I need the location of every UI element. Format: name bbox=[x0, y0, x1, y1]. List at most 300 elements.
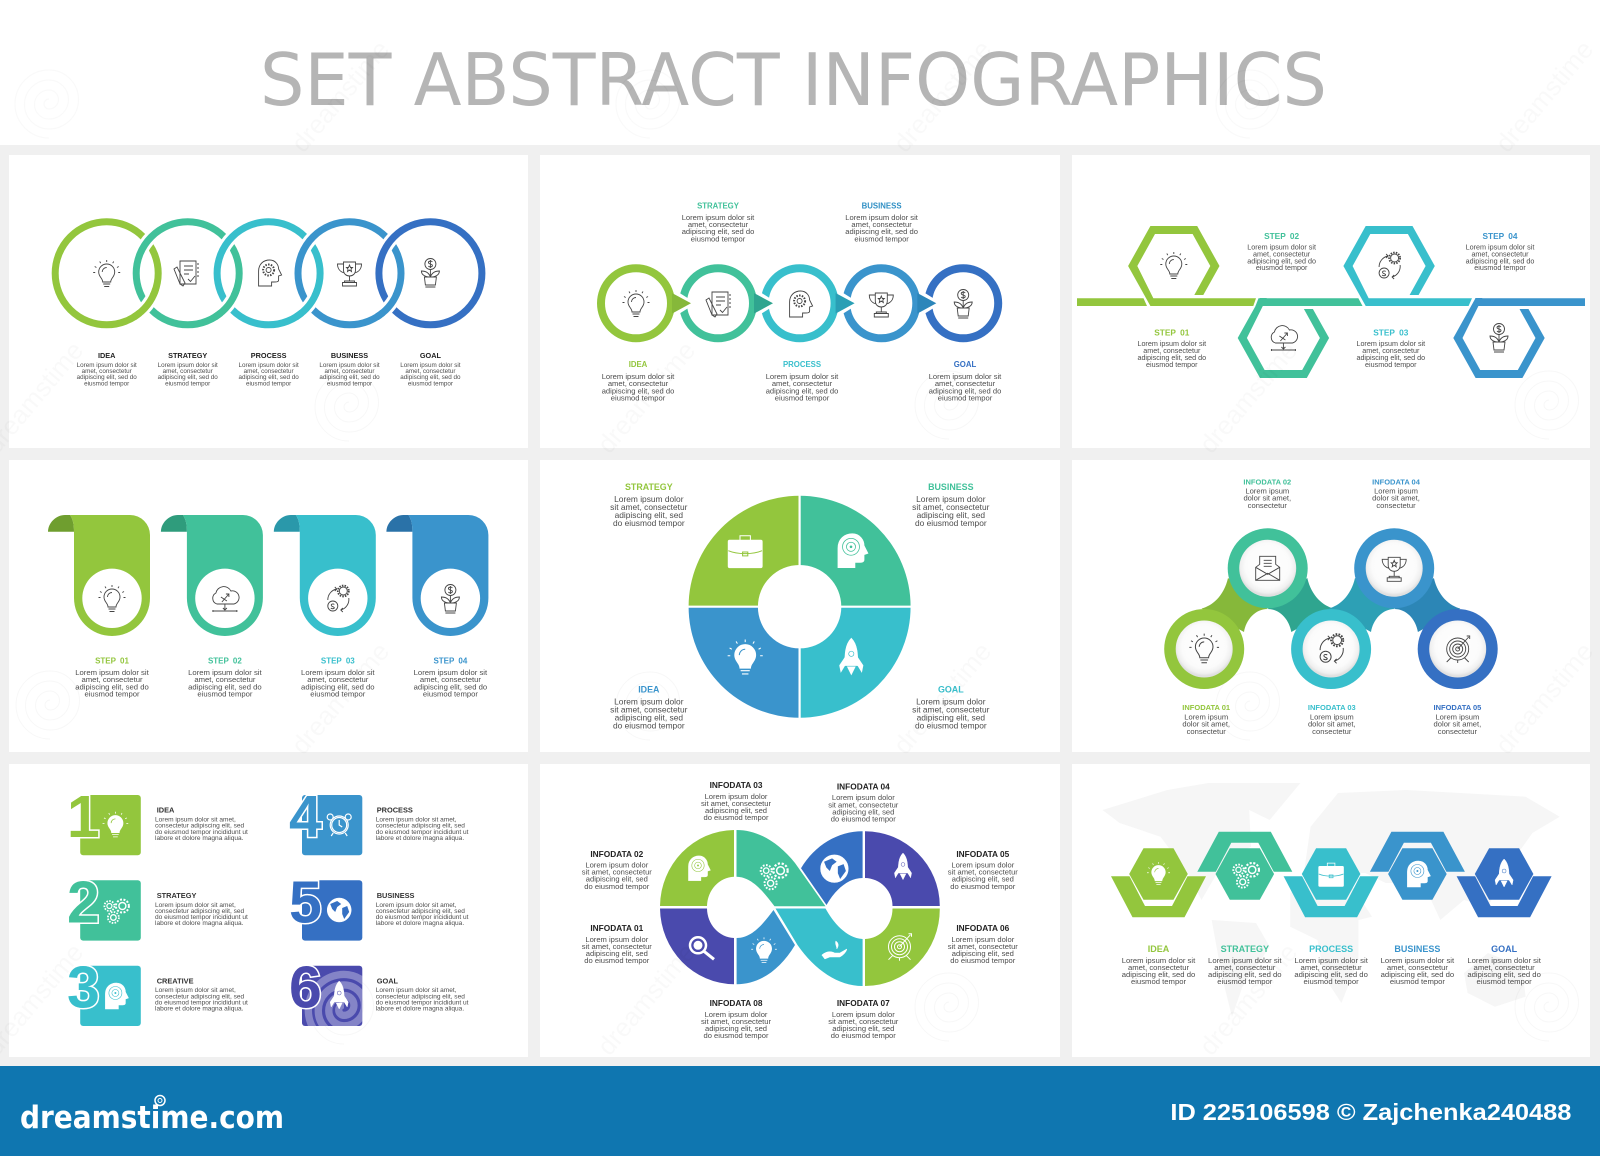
text: GOAL: GOAL bbox=[954, 360, 976, 369]
text: BUSINESS bbox=[912, 482, 990, 528]
text: INFODATA 01: dolor sit amet, bbox=[1182, 720, 1230, 729]
text: INFODATA 02: dolor sit amet, bbox=[1243, 494, 1291, 503]
text: STRATEGY: adipiscing elit, sed do bbox=[1208, 970, 1282, 979]
text: IDEA: Lorem ipsum dolor sit amet, bbox=[155, 817, 236, 824]
text: IDEA: adipiscing elit, sed do bbox=[602, 386, 674, 395]
text: BUSINESS bbox=[845, 202, 919, 243]
text: PROCESS: adipiscing elit, sed do bbox=[238, 374, 299, 381]
text: GOAL: adipiscing elit, sed do bbox=[400, 374, 461, 381]
text: STEP 04: STEP 04 bbox=[433, 656, 468, 666]
text: STRATEGY: amet, consectetur bbox=[163, 368, 213, 375]
text: GOAL: Lorem ipsum dolor sit bbox=[400, 362, 461, 369]
text: STEP 04: adipiscing elit, sed do bbox=[414, 682, 487, 691]
text: GOAL bbox=[400, 351, 461, 387]
text: STEP 02: adipiscing elit, sed do bbox=[188, 682, 262, 691]
text: PROCESS: amet, consectetur bbox=[772, 379, 833, 388]
ribbon 1 bbox=[48, 515, 150, 636]
text: STRATEGY: adipiscing elit, sed do bbox=[158, 374, 218, 381]
text: INFODATA 04: INFODATA 04 bbox=[1372, 477, 1421, 486]
watermark text: dreamstime bbox=[1489, 637, 1599, 760]
text: IDEA: do eiusmod tempor incididunt ut bbox=[155, 829, 248, 836]
timeline bar bbox=[1077, 298, 1585, 306]
panel: infinity diagram bbox=[540, 764, 1060, 1057]
text: STEP 03: Lorem ipsum dolor sit bbox=[301, 668, 375, 677]
text: IDEA: amet, consectetur bbox=[82, 368, 132, 375]
text: INFODATA 04: sit amet, consectetur bbox=[828, 800, 899, 809]
text: STEP 03: STEP 03 bbox=[321, 656, 355, 666]
text: STEP 04: amet, consectetur bbox=[420, 675, 481, 684]
text: INFODATA 03: do eiusmod tempor bbox=[703, 813, 769, 822]
text: IDEA: amet, consectetur bbox=[1128, 963, 1189, 972]
text: PROCESS: amet, consectetur bbox=[1301, 963, 1362, 972]
text: STEP 04 bbox=[1466, 231, 1534, 272]
text: INFODATA 01: sit amet, consectetur bbox=[582, 942, 652, 951]
text: INFODATA 01: do eiusmod tempor bbox=[584, 956, 650, 965]
text: STRATEGY bbox=[682, 202, 755, 243]
text: STEP 01: eiusmod tempor bbox=[84, 690, 140, 699]
hex step 4 bbox=[1370, 832, 1465, 900]
text: STRATEGY: sit amet, consectetur bbox=[610, 502, 688, 512]
text: STRATEGY: Lorem ipsum dolor sit bbox=[682, 213, 755, 222]
text: INFODATA 03 bbox=[701, 780, 772, 822]
panel: connected circles bbox=[1072, 460, 1590, 752]
ribbon 2 bbox=[161, 515, 263, 636]
donut bbox=[687, 494, 912, 719]
text: IDEA: adipiscing elit, sed bbox=[615, 712, 683, 722]
text: INFODATA 04: Lorem ipsum dolor bbox=[832, 793, 895, 802]
text: STRATEGY: do eiusmod tempor bbox=[613, 518, 685, 528]
panel: donut chart bbox=[540, 460, 1060, 752]
text: BUSINESS: do eiusmod tempor incididunt ut bbox=[376, 914, 469, 921]
text: BUSINESS: adipiscing elit, sed do bbox=[845, 227, 918, 236]
infinity segments bbox=[660, 830, 940, 986]
text: STRATEGY: labore et dolore magna aliqua. bbox=[155, 920, 244, 927]
text: STRATEGY: STRATEGY bbox=[1221, 944, 1269, 954]
ribbon 4 bbox=[386, 515, 488, 636]
text: INFODATA 07: Lorem ipsum dolor bbox=[832, 1010, 895, 1019]
text: INFODATA 03: sit amet, consectetur bbox=[701, 799, 772, 808]
text: PROCESS: labore et dolore magna aliqua. bbox=[376, 835, 464, 842]
text: BUSINESS: Lorem ipsum dolor sit bbox=[1381, 956, 1455, 965]
text: IDEA: Lorem ipsum dolor sit bbox=[77, 362, 137, 369]
panel: circles with arrows bbox=[540, 155, 1060, 448]
text: STRATEGY: adipiscing elit, sed bbox=[615, 510, 683, 520]
text: BUSINESS: BUSINESS bbox=[928, 482, 974, 492]
text: INFODATA 03 bbox=[1308, 703, 1356, 736]
text: INFODATA 04: adipiscing elit, sed bbox=[832, 807, 894, 816]
text: GOAL: GOAL bbox=[1491, 944, 1518, 954]
text: INFODATA 05: do eiusmod tempor bbox=[950, 882, 1016, 891]
text: STEP 03: amet, consectetur bbox=[307, 675, 369, 684]
text: STEP 02: Lorem ipsum dolor sit bbox=[188, 668, 262, 677]
text: BUSINESS bbox=[319, 351, 380, 387]
text: PROCESS: Lorem ipsum dolor sit bbox=[766, 372, 839, 381]
text: CREATIVE: do eiusmod tempor incididunt ut bbox=[155, 999, 248, 1006]
item 4: 4 bbox=[289, 784, 322, 850]
text: STRATEGY: eiusmod tempor bbox=[691, 234, 746, 243]
ring icons bbox=[93, 258, 439, 287]
text: GOAL: consectetur adipiscing elit, sed bbox=[376, 993, 465, 1000]
text: STEP 01: Lorem ipsum dolor sit bbox=[1137, 339, 1206, 348]
text: IDEA: eiusmod tempor bbox=[1131, 977, 1186, 986]
text: INFODATA 06 bbox=[948, 923, 1018, 965]
text: BUSINESS: eiusmod tempor bbox=[854, 234, 909, 243]
hexagon icons bbox=[1160, 252, 1508, 352]
text: INFODATA 06: do eiusmod tempor bbox=[950, 956, 1016, 965]
text: STEP 02 bbox=[1247, 231, 1316, 272]
text: INFODATA 05 bbox=[1434, 703, 1481, 736]
text: STEP 02: Lorem ipsum dolor sit bbox=[1247, 242, 1316, 252]
text: PROCESS bbox=[1294, 944, 1369, 986]
text: STRATEGY bbox=[1208, 944, 1282, 986]
text: STEP 04: Lorem ipsum dolor sit bbox=[1466, 242, 1534, 252]
text: STRATEGY: amet, consectetur bbox=[1214, 963, 1276, 972]
text: IDEA bbox=[602, 360, 675, 403]
text: INFODATA 04 bbox=[828, 782, 899, 824]
text: INFODATA 05: Lorem ipsum bbox=[1435, 712, 1479, 722]
text: BUSINESS bbox=[1381, 944, 1455, 986]
text: GOAL: eiusmod tempor bbox=[1477, 977, 1532, 986]
text: BUSINESS: amet, consectetur bbox=[1387, 963, 1448, 972]
text: INFODATA 08: Lorem ipsum dolor bbox=[705, 1010, 768, 1019]
text: GOAL: do eiusmod tempor incididunt ut bbox=[376, 999, 469, 1006]
text: INFODATA 03: adipiscing elit, sed bbox=[705, 806, 767, 815]
text: IDEA: do eiusmod tempor bbox=[613, 720, 685, 730]
text: STEP 01 bbox=[1137, 328, 1206, 369]
text: IDEA: sit amet, consectetur bbox=[610, 704, 688, 714]
text: CREATIVE: CREATIVE bbox=[157, 976, 194, 985]
hex step 3 bbox=[1284, 848, 1379, 917]
text: INFODATA 01 bbox=[1182, 703, 1230, 736]
text: IDEA bbox=[610, 684, 688, 730]
text: IDEA: labore et dolore magna aliqua. bbox=[155, 835, 244, 842]
text: GOAL: do eiusmod tempor bbox=[915, 720, 987, 730]
text: IDEA bbox=[155, 806, 248, 842]
text: INFODATA 05: consectetur bbox=[1438, 727, 1477, 736]
text: PROCESS bbox=[376, 806, 469, 842]
text: IDEA bbox=[77, 351, 137, 387]
text: GOAL: amet, consectetur bbox=[405, 368, 455, 375]
text: INFODATA 05: Lorem ipsum dolor bbox=[951, 861, 1015, 870]
panel: numbered list bbox=[9, 764, 528, 1057]
text: BUSINESS: amet, consectetur bbox=[851, 220, 912, 229]
hex step 2 bbox=[1197, 832, 1292, 900]
connectors bbox=[1202, 578, 1460, 632]
text: STRATEGY bbox=[610, 482, 688, 528]
text: INFODATA 06: Lorem ipsum dolor bbox=[951, 935, 1015, 944]
text: STEP 03: eiusmod tempor bbox=[310, 690, 366, 699]
text: INFODATA 01: Lorem ipsum dolor bbox=[585, 935, 649, 944]
text: IDEA: IDEA bbox=[638, 684, 660, 694]
text: STRATEGY: STRATEGY bbox=[168, 351, 207, 360]
text: PROCESS: Lorem ipsum dolor sit amet, bbox=[376, 817, 457, 824]
footer credit: ID 225106598 © Zajchenka240488 bbox=[1170, 1099, 1572, 1125]
text: STEP 01: eiusmod tempor bbox=[1146, 360, 1198, 369]
text: STEP 01: adipiscing elit, sed do bbox=[75, 682, 149, 691]
text: GOAL: GOAL bbox=[377, 976, 399, 985]
text: INFODATA 01: adipiscing elit, sed bbox=[586, 949, 648, 958]
panel: hexagon timeline bbox=[1072, 155, 1590, 448]
item 6 bbox=[291, 966, 362, 1026]
text: CREATIVE: labore et dolore magna aliqua. bbox=[155, 1005, 244, 1012]
text: STEP 01: adipiscing elit, sed do bbox=[1137, 353, 1206, 362]
text: GOAL: Lorem ipsum dolor sit bbox=[929, 372, 1002, 381]
text: INFODATA 02: INFODATA 02 bbox=[1243, 477, 1291, 486]
text: INFODATA 07: do eiusmod tempor bbox=[831, 1031, 896, 1040]
text: INFODATA 06: sit amet, consectetur bbox=[948, 942, 1018, 951]
text: STEP 03: adipiscing elit, sed do bbox=[301, 682, 375, 691]
item 1: 1 bbox=[67, 784, 100, 850]
text: STEP 04: eiusmod tempor bbox=[1474, 263, 1526, 272]
text: INFODATA 05: INFODATA 05 bbox=[1434, 703, 1481, 712]
infinity icons bbox=[688, 853, 912, 963]
text: IDEA bbox=[1122, 944, 1196, 986]
text: BUSINESS bbox=[376, 891, 469, 927]
watermark text: dreamstime bbox=[285, 637, 395, 760]
text: PROCESS: eiusmod tempor bbox=[246, 380, 291, 387]
circle 5 bbox=[1418, 609, 1498, 689]
watermark text: dreamstime bbox=[591, 336, 701, 459]
ribbon 3 bbox=[274, 515, 376, 636]
text: INFODATA 06: adipiscing elit, sed bbox=[952, 949, 1014, 958]
text: INFODATA 04: Lorem ipsum bbox=[1374, 486, 1418, 495]
text: INFODATA 02 bbox=[582, 849, 652, 891]
text: INFODATA 01: consectetur bbox=[1187, 727, 1226, 736]
text: BUSINESS: consectetur adipiscing elit, sed bbox=[376, 908, 465, 915]
text: STEP 01: STEP 01 bbox=[95, 656, 129, 666]
text: GOAL: eiusmod tempor bbox=[938, 394, 993, 403]
text: STEP 04 bbox=[414, 656, 488, 699]
text: IDEA: eiusmod tempor bbox=[84, 380, 129, 387]
text: INFODATA 04: dolor sit amet, bbox=[1372, 494, 1420, 503]
text: BUSINESS: adipiscing elit, sed do bbox=[319, 374, 380, 381]
text: PROCESS bbox=[766, 360, 839, 403]
text: IDEA: adipiscing elit, sed do bbox=[1122, 970, 1195, 979]
text: IDEA: Lorem ipsum dolor sit bbox=[602, 372, 675, 381]
text: STRATEGY: Lorem ipsum dolor sit bbox=[1208, 956, 1282, 965]
item 2: 2 bbox=[67, 869, 100, 935]
text: INFODATA 04: consectetur bbox=[1376, 501, 1416, 510]
text: PROCESS: Lorem ipsum dolor sit bbox=[238, 362, 299, 369]
watermark text: dreamstime bbox=[1193, 938, 1303, 1061]
text: GOAL: adipiscing elit, sed do bbox=[929, 386, 1001, 395]
text: STEP 02: adipiscing elit, sed do bbox=[1247, 256, 1316, 265]
text: STEP 01: amet, consectetur bbox=[81, 675, 143, 684]
text: GOAL bbox=[929, 360, 1002, 403]
text: BUSINESS: amet, consectetur bbox=[324, 368, 375, 375]
text: CREATIVE: consectetur adipiscing elit, sed bbox=[155, 993, 245, 1000]
footer bar bbox=[0, 1066, 1600, 1156]
text: PROCESS: adipiscing elit, sed do bbox=[1294, 970, 1368, 979]
panel: ribbons bbox=[9, 460, 528, 752]
text: INFODATA 05: sit amet, consectetur bbox=[948, 868, 1018, 877]
text: BUSINESS: labore et dolore magna aliqua. bbox=[376, 920, 464, 927]
text: BUSINESS: eiusmod tempor bbox=[327, 380, 372, 387]
text: STRATEGY: adipiscing elit, sed do bbox=[682, 227, 754, 236]
text: IDEA: adipiscing elit, sed do bbox=[77, 374, 137, 381]
text: GOAL: Lorem ipsum dolor bbox=[916, 696, 986, 706]
text: GOAL: GOAL bbox=[938, 684, 964, 694]
text: PROCESS: PROCESS bbox=[251, 351, 287, 360]
circle 1 bbox=[1164, 609, 1244, 689]
text: INFODATA 07 bbox=[828, 998, 899, 1040]
text: BUSINESS: BUSINESS bbox=[862, 202, 902, 210]
text: INFODATA 02: sit amet, consectetur bbox=[582, 868, 652, 877]
text: STRATEGY: STRATEGY bbox=[697, 202, 740, 210]
text: STEP 02: STEP 02 bbox=[1264, 231, 1300, 241]
text: GOAL: labore et dolore magna aliqua. bbox=[376, 1005, 464, 1012]
ring icons bbox=[622, 290, 972, 318]
text: BUSINESS: adipiscing elit, sed do bbox=[1381, 970, 1454, 979]
circle 2 bbox=[1228, 528, 1308, 608]
text: INFODATA 07: sit amet, consectetur bbox=[828, 1017, 899, 1026]
text: CREATIVE: Lorem ipsum dolor sit amet, bbox=[155, 987, 236, 994]
hex step 5 bbox=[1457, 848, 1552, 917]
text: BUSINESS: BUSINESS bbox=[1394, 944, 1440, 954]
text: GOAL bbox=[1467, 944, 1542, 986]
text: INFODATA 02: INFODATA 02 bbox=[590, 849, 644, 859]
text: GOAL bbox=[912, 684, 990, 730]
text: STEP 03: STEP 03 bbox=[1373, 328, 1409, 338]
item 4 bbox=[289, 784, 362, 855]
text: GOAL: eiusmod tempor bbox=[408, 380, 453, 387]
text: STEP 03: eiusmod tempor bbox=[1365, 360, 1417, 369]
text: STRATEGY: amet, consectetur bbox=[688, 220, 749, 229]
text: PROCESS bbox=[238, 351, 299, 387]
text: INFODATA 03: dolor sit amet, bbox=[1308, 720, 1356, 729]
text: BUSINESS: sit amet, consectetur bbox=[912, 502, 990, 512]
text: PROCESS: PROCESS bbox=[1309, 944, 1353, 954]
circle 4 bbox=[1354, 528, 1434, 608]
text: INFODATA 08: do eiusmod tempor bbox=[703, 1031, 769, 1040]
text: STRATEGY: do eiusmod tempor incididunt ut bbox=[155, 914, 248, 921]
text: INFODATA 05: INFODATA 05 bbox=[956, 849, 1010, 859]
item 3: 3 bbox=[67, 955, 100, 1021]
footer logo: dreamstime.com bbox=[20, 1100, 284, 1136]
world map bbox=[1102, 783, 1560, 1017]
text: STRATEGY bbox=[158, 351, 218, 387]
text: STEP 03: amet, consectetur bbox=[1362, 346, 1420, 355]
text: PROCESS: Lorem ipsum dolor sit bbox=[1294, 956, 1369, 965]
panel: hexagons over world map bbox=[1072, 764, 1590, 1057]
text: INFODATA 02: do eiusmod tempor bbox=[584, 882, 650, 891]
text: STEP 02: amet, consectetur bbox=[1253, 249, 1311, 258]
text: INFODATA 03: INFODATA 03 bbox=[710, 780, 763, 790]
text: STEP 04: adipiscing elit, sed do bbox=[1466, 256, 1534, 265]
text: STEP 03 bbox=[1356, 328, 1425, 369]
text: GOAL: amet, consectetur bbox=[935, 379, 996, 388]
text: IDEA: Lorem ipsum dolor sit bbox=[1122, 956, 1196, 965]
text: STEP 04: STEP 04 bbox=[1482, 231, 1518, 241]
text: INFODATA 03: Lorem ipsum bbox=[1310, 712, 1354, 722]
text: STEP 04: amet, consectetur bbox=[1471, 249, 1529, 258]
text: IDEA: consectetur adipiscing elit, sed bbox=[155, 823, 245, 830]
text: PROCESS: PROCESS bbox=[783, 360, 821, 369]
donut icons bbox=[728, 534, 868, 675]
text: IDEA: IDEA bbox=[1148, 944, 1170, 954]
text: STEP 02: eiusmod tempor bbox=[1256, 263, 1308, 272]
text: STEP 01: amet, consectetur bbox=[1143, 346, 1201, 355]
text: INFODATA 04: INFODATA 04 bbox=[837, 782, 890, 792]
text: BUSINESS: Lorem ipsum dolor sit bbox=[845, 213, 919, 222]
text: STRATEGY: eiusmod tempor bbox=[165, 380, 210, 387]
text: INFODATA 05: adipiscing elit, sed bbox=[952, 875, 1014, 884]
title: SET ABSTRACT INFOGRAPHICS bbox=[260, 38, 1327, 122]
text: BUSINESS: Lorem ipsum dolor bbox=[916, 494, 986, 504]
text: STRATEGY: STRATEGY bbox=[625, 482, 673, 492]
text: BUSINESS: BUSINESS bbox=[331, 351, 368, 360]
hex step 1 bbox=[1111, 848, 1206, 917]
text: INFODATA 02: Lorem ipsum bbox=[1245, 486, 1289, 495]
text: INFODATA 06: INFODATA 06 bbox=[956, 923, 1010, 933]
text: GOAL: adipiscing elit, sed bbox=[917, 712, 985, 722]
text: BUSINESS: do eiusmod tempor bbox=[915, 518, 987, 528]
text: PROCESS: eiusmod tempor bbox=[1304, 977, 1359, 986]
text: STEP 02 bbox=[188, 656, 262, 699]
text: PROCESS: amet, consectetur bbox=[244, 368, 294, 375]
text: STEP 02: eiusmod tempor bbox=[197, 690, 253, 699]
text: IDEA: Lorem ipsum dolor bbox=[614, 696, 684, 706]
item 2 bbox=[67, 869, 141, 941]
panel: interlocked circles bbox=[9, 155, 528, 448]
text: IDEA: IDEA bbox=[98, 351, 116, 360]
text: STRATEGY: Lorem ipsum dolor sit amet, bbox=[155, 902, 236, 909]
text: INFODATA 02: Lorem ipsum dolor bbox=[585, 861, 649, 870]
text: INFODATA 08 bbox=[701, 998, 772, 1040]
text: INFODATA 04 bbox=[1372, 477, 1421, 510]
text: INFODATA 03: consectetur bbox=[1312, 727, 1352, 736]
text: INFODATA 02: consectetur bbox=[1248, 501, 1287, 510]
item 6: 6 bbox=[289, 955, 322, 1021]
text: GOAL: GOAL bbox=[420, 351, 441, 360]
text: BUSINESS: BUSINESS bbox=[377, 891, 415, 900]
hexagons bbox=[1128, 226, 1545, 378]
text: INFODATA 08: INFODATA 08 bbox=[710, 998, 763, 1008]
text: STEP 01: Lorem ipsum dolor sit bbox=[75, 668, 150, 677]
item 1 bbox=[67, 784, 141, 855]
text: BUSINESS: adipiscing elit, sed bbox=[917, 510, 985, 520]
text: IDEA: IDEA bbox=[157, 806, 175, 815]
text: BUSINESS: eiusmod tempor bbox=[1390, 977, 1445, 986]
text: PROCESS: adipiscing elit, sed do bbox=[766, 386, 838, 395]
text: STRATEGY: Lorem ipsum dolor bbox=[614, 494, 684, 504]
text: IDEA: amet, consectetur bbox=[608, 379, 669, 388]
text: INFODATA 01: INFODATA 01 bbox=[1182, 703, 1230, 712]
watermark text: dreamstime bbox=[887, 35, 997, 158]
item 3 bbox=[67, 955, 141, 1026]
text: GOAL: adipiscing elit, sed do bbox=[1467, 970, 1541, 979]
watermark text: dreamstime bbox=[285, 35, 395, 158]
text: BUSINESS: Lorem ipsum dolor sit bbox=[319, 362, 380, 369]
text: INFODATA 08: sit amet, consectetur bbox=[701, 1017, 772, 1026]
text: INFODATA 02: adipiscing elit, sed bbox=[586, 875, 648, 884]
text: IDEA: eiusmod tempor bbox=[611, 394, 666, 403]
text: BUSINESS: Lorem ipsum dolor sit amet, bbox=[376, 902, 457, 909]
text: INFODATA 03: Lorem ipsum dolor bbox=[705, 792, 768, 801]
text: CREATIVE bbox=[155, 976, 248, 1012]
text: STEP 04: Lorem ipsum dolor sit bbox=[414, 668, 488, 677]
text: GOAL: amet, consectetur bbox=[1474, 963, 1535, 972]
watermark text: dreamstime bbox=[591, 938, 701, 1061]
text: PROCESS: do eiusmod tempor incididunt ut bbox=[376, 829, 469, 836]
text: STEP 01: STEP 01 bbox=[1154, 328, 1190, 338]
text: STRATEGY bbox=[155, 891, 248, 927]
watermark text: dreamstime bbox=[1489, 35, 1599, 158]
watermark text: dreamstime bbox=[1193, 336, 1303, 459]
text: GOAL: Lorem ipsum dolor sit amet, bbox=[376, 987, 457, 994]
text: STRATEGY: STRATEGY bbox=[157, 891, 196, 900]
text: INFODATA 01: INFODATA 01 bbox=[590, 923, 644, 933]
